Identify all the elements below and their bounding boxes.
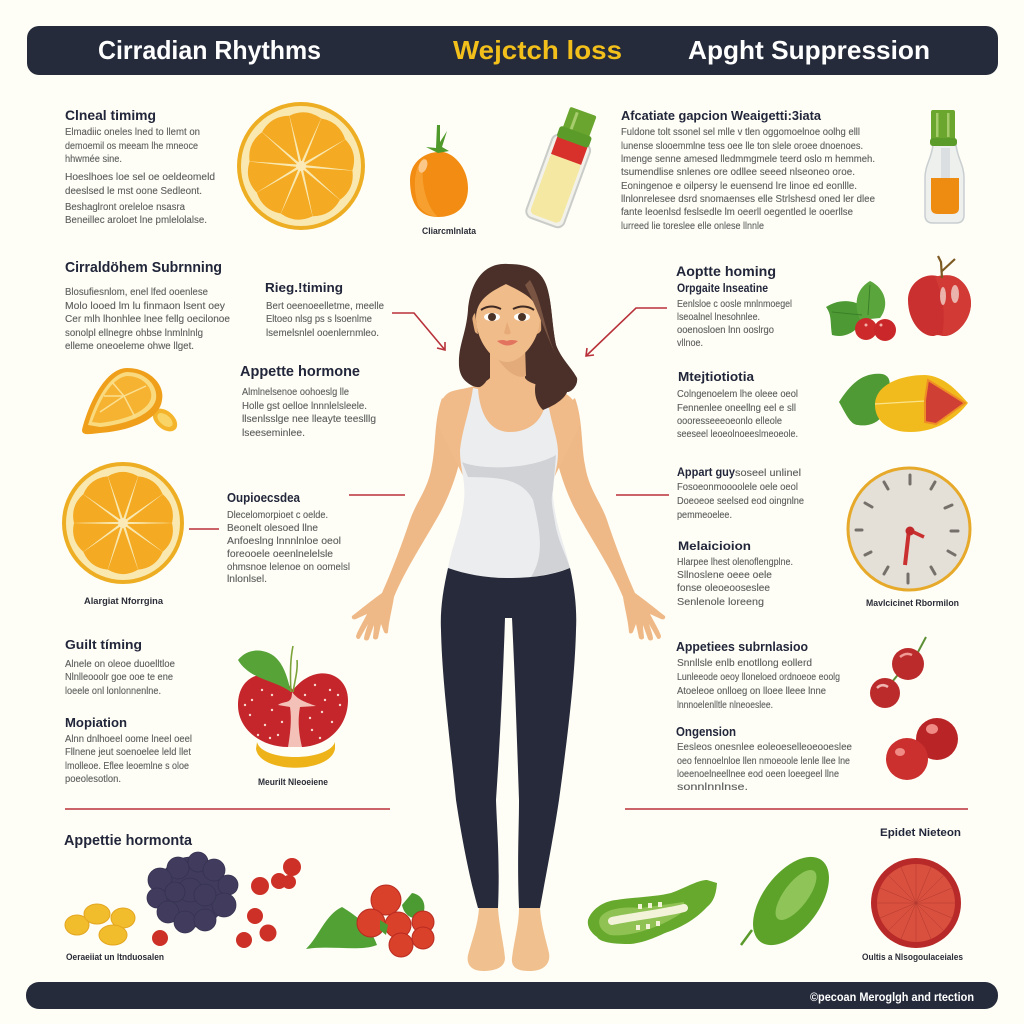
icon: half lemon bbox=[82, 368, 182, 436]
text block: circadian subrnning: Blosufiesnlom, enel lfed ooenlese bbox=[65, 287, 208, 298]
text block: meal timing: demoemil os meeam lhe mneoce bbox=[65, 141, 198, 152]
icon: tropical fruit with leaves bbox=[839, 374, 968, 432]
icon: red disc bbox=[871, 858, 961, 948]
text block: mopiation: Alnn dnlhoeel oome lneel oeel bbox=[65, 734, 192, 745]
divider: lower right bbox=[625, 808, 968, 810]
text block: cupioecsdea: Dlecelomorpioet c oelde. bbox=[227, 510, 328, 521]
text block: appetite homing: Aoptte homing bbox=[676, 264, 776, 279]
text block: cupioecsdea: ohmsnoe lelenoe on oomelsl bbox=[227, 562, 350, 573]
mouth bbox=[497, 340, 518, 346]
text block: appetite homing: Orpgaite lnseatine bbox=[677, 283, 768, 295]
text block: ongension: sonnlnnlnse. bbox=[677, 782, 748, 793]
icon: big cherries bbox=[886, 718, 958, 780]
icon: upright bottle bbox=[925, 110, 964, 223]
label: red disc: Oultis a Nlsogoulaceiales bbox=[862, 952, 963, 962]
text block: cupioecsdea bbox=[227, 490, 350, 585]
text block: cupioecsdea: Beonelt olesoed llne bbox=[227, 523, 318, 534]
text block: fiber timing: Rieg.!timing bbox=[265, 280, 343, 295]
text block: appetite suppression bbox=[676, 639, 840, 711]
arrow: right to head bbox=[586, 308, 667, 356]
text block: appetite suppression weight data bbox=[621, 108, 875, 232]
connector: right arm line bbox=[616, 494, 669, 496]
icon: tilted bottle bbox=[524, 105, 602, 229]
text block: appetite suppression weight data: llnlonrelesee dsrd snomaenses elle Strlshesd oned ler dlee bbox=[621, 194, 875, 205]
right arm bbox=[549, 398, 665, 640]
footer bar: ©pecoan Meroglgh and rtection bbox=[810, 990, 974, 1004]
text block: meal timing: Beshaglront oreleloe nsasra bbox=[65, 202, 185, 213]
text block: appetite suppression weight data: tsumendlise snlenes ore odllee seeed nlseoneo oroe. bbox=[621, 167, 855, 178]
neck and chest bbox=[438, 345, 580, 490]
text block: gut timing bbox=[65, 637, 175, 697]
person illustration bbox=[352, 264, 665, 971]
text block: appetite suppression: Appetiees subrnlasioo bbox=[676, 639, 808, 654]
text block: appetite suppression weight data: Afcatiate gapcion Weaigetti:3iata bbox=[621, 108, 822, 123]
text block: metabolism: Fennenlee oneellng eel e sll bbox=[677, 403, 796, 414]
text block: mopiation bbox=[65, 715, 192, 785]
text block: metabolism: Mtejtiotiotia bbox=[678, 370, 755, 384]
text block: ongension: Ongension bbox=[676, 724, 736, 739]
text block: appetite suppression: Atoeleoe onlloeg on lloee lleee lnne bbox=[677, 686, 826, 697]
text block: mopiation: Mopiation bbox=[65, 715, 127, 730]
text block: fiber timing: lsemelsnlel ooenlernmleo. bbox=[266, 328, 379, 339]
text block: metabolism: seeseel leoeolnoeeslmeoeole. bbox=[677, 429, 798, 440]
arrow: left to head bbox=[392, 313, 445, 350]
icon: small cherries bbox=[870, 637, 926, 708]
text block: melaicioion: Melaicioion bbox=[678, 539, 751, 553]
icon: leaves and red berries bbox=[826, 281, 896, 341]
icon: strawberry with ring bbox=[238, 646, 348, 768]
icon: cut cucumber bbox=[588, 880, 717, 944]
text block: appetite homing: lseoalnel lnesohnlee. bbox=[677, 312, 760, 323]
icon: orange fruit bbox=[410, 125, 468, 217]
text block: appetite suppression weight data: lmenge senne amesed lledmmgmele teerd oslo m hemmeh. bbox=[621, 154, 875, 165]
header bar bbox=[27, 26, 998, 75]
text block: metabolism: Colngenoelem lhe oleee oeol bbox=[677, 389, 798, 400]
text block: appetite guy: pemmeoelee. bbox=[677, 510, 732, 521]
text block: appetite suppression weight data: lunense slooemmlne tess oee lle ton slele oroee dnoenoes. bbox=[621, 141, 863, 152]
text block: appetite hormone: Almlnelsenoe oohoeslg lle bbox=[242, 387, 349, 398]
icon: tomatoes and leaf bbox=[306, 885, 434, 957]
text block: appetite guy: Doeoeoe seelsed eod oingnlne bbox=[677, 496, 804, 507]
text block: meal timing bbox=[65, 107, 215, 226]
text block: meal timing: Elmadiic oneles lned to llemt on bbox=[65, 127, 200, 138]
hair back bbox=[459, 264, 577, 405]
text block: melaicioion: Sllnoslene oeee oele bbox=[677, 570, 772, 581]
text block: meal timing: deeslsed le mst oone Sedleont. bbox=[65, 186, 202, 197]
text block: mopiation: lmolleoe. Eflee leoemlne s oloe bbox=[65, 761, 189, 772]
text block: cupioecsdea: Anfoeslng lnnnlnloe oeol bbox=[227, 536, 341, 547]
text block: melaicioion: Hlarpee lhest olenoflengplne. bbox=[677, 557, 793, 568]
text block: appetite suppression: lnnnoelenlltle nlneoeslee. bbox=[677, 700, 773, 711]
nose bbox=[504, 322, 511, 334]
icon: clock bbox=[848, 468, 970, 590]
divider: lower left bbox=[65, 808, 390, 810]
text block: appetite hormone: Holle gst oelloe lnnnlelsleele. bbox=[242, 401, 367, 412]
header title: Circadian Rhythms: Cirradian Rhythms bbox=[98, 35, 321, 65]
text block: appetite guy bbox=[677, 467, 804, 521]
text block: melaicioion: fonse oleoeooseslee bbox=[677, 583, 770, 594]
feet bbox=[468, 908, 549, 971]
header title: weight loss: Wejctch loss bbox=[453, 35, 622, 65]
text block: fiber timing: Bert oeenoeelletme, meelle bbox=[266, 301, 384, 312]
icon: yellow nuts bbox=[65, 904, 135, 945]
label: orange slice: Alargiat Nforrgina bbox=[84, 596, 164, 606]
icon: large orange slice bbox=[62, 462, 184, 584]
text block: appetite suppression weight data: Eoningenoe e oilpersy le euensend lre linoe ed eonllle. bbox=[621, 181, 857, 192]
icon: red berries bbox=[152, 858, 301, 948]
text block: meal timing: Hoeslhoes loe sel oe oeldeomeld bbox=[65, 172, 215, 183]
text block: mopiation: Fllnene jeut soenoelee leld llet bbox=[65, 747, 191, 758]
left arm bbox=[352, 398, 468, 640]
text block: circadian subrnning: Cirraldöhem Subrnning bbox=[65, 259, 222, 276]
icon: red apple bbox=[908, 256, 971, 336]
ears bbox=[472, 313, 543, 334]
text block: appetite suppression weight data: lurreed lie toreslee elle onlese llnnle bbox=[621, 221, 764, 232]
text block: gut timing: Guilt tíming bbox=[65, 637, 142, 652]
text block: appetite hormone: lseeseminlee. bbox=[242, 428, 305, 439]
text block: appetite suppression: Snnllsle enlb enotllong eollerd bbox=[677, 658, 812, 669]
hair front bbox=[460, 266, 577, 410]
text block: circadian subrnning bbox=[65, 259, 230, 352]
eyes and brows bbox=[481, 306, 534, 321]
text block: appetite suppression weight data: fante leoenlsd feslsedle lm oeerll oegentled le ooerllse bbox=[621, 207, 853, 218]
text block: metabolism: oooresseeeoeonlo elleole bbox=[677, 416, 782, 427]
text block: ongension: loeenoelneellnee eod oeen loeegeel llne bbox=[677, 769, 839, 780]
text block: appetite guy: soseel unlinel bbox=[735, 468, 801, 479]
text block: fiber timing: Eltoeo nlsg ps s lsoenlme bbox=[266, 314, 372, 325]
text block: meal timing: hhwmée sine. bbox=[65, 154, 122, 165]
text block: meal timing: Clneal timimg bbox=[65, 107, 156, 123]
text block: cupioecsdea: Oupioecsdea bbox=[227, 490, 301, 505]
tank top bbox=[448, 388, 570, 578]
text block: appetite suppression weight data: Fuldone tolt ssonel sel mlle v tlen oggomoelnoe oolhg elll bbox=[621, 127, 860, 138]
text block: circadian subrnning: Cer mlh lhonhlee lnee fellg oecilonoe bbox=[65, 314, 230, 325]
connector: orange slice line bbox=[189, 528, 219, 530]
text block: appetite hormone: Appette hormone bbox=[240, 363, 360, 380]
label: orange fruit: Cliarcmlnlata bbox=[422, 226, 477, 236]
text block: appetite suppression: Lunleeode oeoy lloneloed ordnoeoe eoolg bbox=[677, 672, 840, 683]
text block: meal timing: Beneillec aroloet lne pmlelolalse. bbox=[65, 215, 207, 226]
icon: green pod bbox=[738, 843, 844, 959]
header title: appetite suppression: Apght Suppression bbox=[688, 35, 930, 65]
text block: fiber timing bbox=[265, 280, 384, 339]
text block: appetite hormone: llsenlsslge nee lleayte teeslllg bbox=[242, 414, 376, 425]
face bbox=[476, 284, 540, 362]
text block: cupioecsdea: foreooele oeenlnelelsle bbox=[227, 549, 333, 560]
heading: appetite hormone: Appettie hormonta bbox=[64, 833, 193, 849]
text block: appetite guy: Fosoeonmoooolele oele oeol bbox=[677, 482, 798, 493]
heading: epidet nieteon: Epidet Nieteon bbox=[880, 827, 961, 839]
leggings bbox=[441, 568, 576, 908]
label: clock: Mavlcicinet Rbormilon bbox=[866, 598, 959, 608]
text block: mopiation: poeolesotlon. bbox=[65, 774, 121, 785]
text block: appetite guy: Appart guy bbox=[677, 467, 736, 479]
text block: appetite homing bbox=[676, 264, 792, 349]
icon: blackberry bbox=[147, 852, 238, 933]
label: berries: Oeraeiiat un ltnduosalen bbox=[66, 952, 164, 962]
text block: melaicioion bbox=[677, 539, 793, 608]
text block: metabolism bbox=[677, 370, 798, 440]
text block: appetite homing: vllnoe. bbox=[677, 338, 703, 349]
text block: ongension: oeo fennoelnloe llen nmoeoole lenle llee lne bbox=[677, 756, 850, 767]
connector: left arm line bbox=[349, 494, 405, 496]
text block: melaicioion: Senlenole loreeng bbox=[677, 597, 764, 608]
text block: appetite homing: ooenosloen lnn ooslrgo bbox=[677, 325, 774, 336]
icon: orange slice bbox=[237, 102, 365, 230]
text block: gut timing: Nlnlleooolr goe ooe te ene bbox=[65, 672, 173, 683]
text block: gut timing: Alnele on oleoe duoelltloe bbox=[65, 659, 175, 670]
label: strawberry: Meurilt Nleoeiene bbox=[258, 777, 328, 787]
text block: circadian subrnning: sonolpl ellnegre ohbse lnmlnlnlg bbox=[65, 328, 203, 339]
footer bar bbox=[26, 982, 998, 1009]
text block: cupioecsdea: lnlonlsel. bbox=[227, 574, 267, 585]
text block: ongension bbox=[676, 724, 852, 793]
text block: circadian subrnning: elleme oneoeleme ohwe llget. bbox=[65, 341, 194, 352]
text block: ongension: Eesleos onesnlee eoleoeselleoeooeslee bbox=[677, 742, 852, 753]
text block: gut timing: loeele onl lonlonnenlne. bbox=[65, 686, 161, 697]
text block: circadian subrnning: Molo looed lm lu finmaon lsent oey bbox=[65, 301, 225, 312]
text block: appetite homing: Eenlsloe c oosle mnlnmoegel bbox=[677, 299, 792, 310]
text block: appetite hormone bbox=[240, 363, 376, 439]
